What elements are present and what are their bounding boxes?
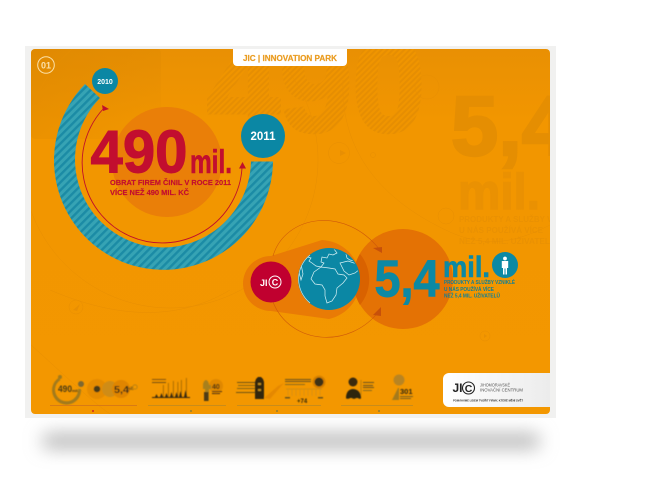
thumbnail 1: revenue: mil. <box>72 388 79 393</box>
JIC logo box <box>443 373 550 407</box>
thumbnail 6: timeline <box>285 376 326 405</box>
ghost orbit lines <box>31 111 546 414</box>
unit mil.: mil. <box>190 143 232 180</box>
unit mil.: mil. <box>443 251 490 284</box>
background ghost graphics <box>31 90 550 414</box>
thumbnail 6: timeline: +74 <box>297 399 308 405</box>
floor shadow <box>42 434 540 448</box>
year badge 2010 <box>92 68 118 94</box>
JIC logo box: JIHOMORAVSKÉ <box>480 382 510 388</box>
users caption: U NÁS POUŽÍVÁ VÍCE <box>444 285 495 293</box>
ghost number 490: 490 <box>207 12 425 159</box>
year badge 2010: 2010 <box>97 79 113 86</box>
users caption <box>444 278 516 300</box>
ghost caption: NEŽ 5,4 MIL. UŽIVATELŮ <box>459 235 556 246</box>
paper sheet <box>25 46 556 418</box>
year badge 2011 <box>241 114 285 158</box>
value 490: 490 <box>90 118 188 186</box>
users caption: NEŽ 5,4 MIL. UŽIVATELŮ <box>444 292 500 300</box>
thumbnail 4: person 40: 40 <box>212 384 220 391</box>
revenue caption <box>110 178 231 197</box>
tapered halo behind logo and globe <box>243 240 360 319</box>
globe icon <box>298 246 360 310</box>
ghost caption: U NÁS POUŽÍVÁ VÍCE <box>459 224 543 235</box>
JIC logo box: JI <box>452 381 463 395</box>
thumbnail navigation strip <box>52 374 413 405</box>
thin orbit arrows <box>273 220 380 337</box>
overlap area <box>353 254 369 305</box>
page number badge: 01 <box>41 60 51 70</box>
ghost number 5,4: 5,4 <box>451 79 569 173</box>
thumbnail 7: graduate <box>346 378 374 399</box>
header tab: JIC | INNOVATION PARK <box>243 54 337 63</box>
ghost arrow marks <box>73 150 487 338</box>
ghost caption <box>460 215 550 244</box>
person icon <box>492 252 518 278</box>
thumbnail 2: users <box>87 379 137 399</box>
revenue chart: 490 mil. <box>54 68 285 270</box>
thumbnail 4: person 40 <box>203 379 223 401</box>
thumbnail 1: revenue <box>52 375 84 405</box>
page number badge <box>38 57 54 73</box>
panel: orange background <box>31 49 550 414</box>
thumbnail 1: revenue: 490 <box>58 384 72 395</box>
thumbnail divider rules and page dots <box>50 405 413 412</box>
JIC logo badge: C <box>272 278 279 288</box>
thumbnail 2: users: 5,4 <box>114 385 129 396</box>
thumbnail 2: users: mil. <box>126 386 134 391</box>
JIC logo box: POMÁHÁME LIDEM TVOŘIT FIRMY, KTERÉ MĚNÍ SVĚT <box>453 398 523 402</box>
thumbnail 5: bottle <box>236 377 284 399</box>
ghost word mil.: mil. <box>458 164 540 220</box>
header tab <box>233 49 347 66</box>
JIC logo box: INOVAČNÍ CENTRUM <box>480 386 523 394</box>
users caption: PRODUKTY A SLUŽBY VZNIKLÉ <box>444 278 516 286</box>
revenue caption: OBRAT FIREM ČINIL V ROCE 2011 <box>110 178 231 187</box>
ghost caption: PRODUKTY A SLUŽBY VZNIKLÉ <box>459 213 581 224</box>
orange centre circle <box>112 107 222 217</box>
thumbnail 3: bar chart <box>152 378 190 398</box>
revenue caption: VÍCE NEŽ 490 MIL. KČ <box>110 188 190 197</box>
year badge 2011: 2011 <box>251 131 276 143</box>
users chart: 5,4 mil. <box>243 220 518 337</box>
large circle <box>353 229 453 329</box>
JIC logo badge: JI <box>260 278 268 288</box>
hatched progress ring <box>54 84 273 270</box>
JIC logo badge <box>250 262 292 302</box>
red arrow arc <box>82 105 246 243</box>
thumbnail 8: pyramid 301 <box>392 374 413 400</box>
thumbnail 8: pyramid 301: 301 <box>400 387 413 396</box>
JIC logo box: C <box>465 383 473 395</box>
value 5,4: 5,4 <box>374 250 440 308</box>
